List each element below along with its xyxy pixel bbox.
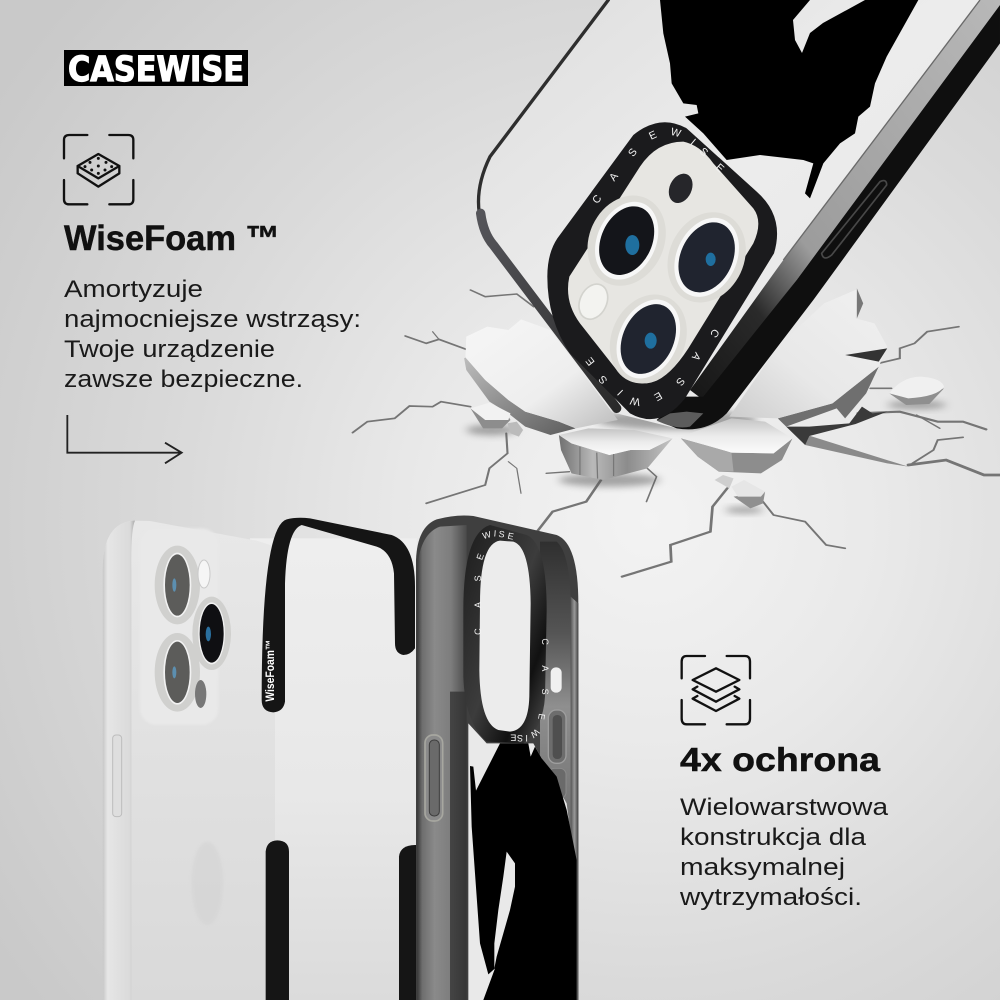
left band shade [450, 692, 467, 1000]
ring lettering: A [689, 350, 703, 363]
ring lettering: S [540, 689, 550, 695]
ring lettering: A [607, 170, 621, 184]
ring lettering: A [473, 602, 483, 608]
flash and sensor [574, 170, 697, 324]
right rim [571, 597, 578, 1000]
strip bottom left [266, 840, 289, 1000]
text block: 4x ochrona description: Wielowarstwowa [680, 794, 889, 821]
ring lettering: S [697, 145, 710, 159]
ring lettering: S [473, 575, 483, 581]
case right edge band with side button [657, 0, 1000, 429]
ring lettering: E [647, 129, 659, 143]
bottom dark case [416, 515, 578, 1000]
ring lettering: S [517, 733, 523, 743]
flake: right [729, 288, 887, 445]
ring lettering: C [707, 326, 722, 340]
ring lettering: I [493, 528, 497, 539]
ring lettering: W [628, 394, 641, 408]
flake: center left [559, 428, 673, 480]
camera plateau [568, 142, 758, 383]
cracked wall flakes behind phone [464, 288, 944, 508]
heading: WiseFoam: WiseFoam ™ [64, 219, 280, 258]
camera plateau [140, 528, 218, 725]
flash cutout [551, 667, 562, 693]
text block: WiseFoam description: Twoje urządzenie [64, 336, 275, 363]
ring lettering: E [584, 355, 597, 368]
WiseFoam strip top [262, 518, 415, 712]
ring lettering: C [590, 192, 605, 206]
logo: CASEWISE: CASEWISE [68, 50, 244, 90]
phone body [103, 521, 275, 1000]
text block: WiseFoam description: Amortyzuje [64, 276, 203, 303]
side button [425, 735, 443, 821]
top phone in clear case [476, 0, 1000, 429]
flake: center right [681, 418, 792, 473]
camera ring opening [479, 541, 531, 732]
ring lettering: A [540, 665, 550, 671]
left band metal [417, 525, 467, 1000]
text block: 4x ochrona description: wytrzymałości. [679, 884, 862, 911]
ring lettering: C [473, 628, 483, 635]
arrow [67, 415, 182, 463]
ring lettering: S [498, 529, 505, 540]
ring lettering: W [669, 126, 683, 140]
camera ring [547, 122, 777, 419]
phone side frame [103, 521, 135, 1000]
ring lettering: E [652, 389, 664, 403]
lenses [573, 183, 760, 396]
text block: 4x ochrona description [679, 794, 889, 911]
ring lettering [473, 528, 550, 743]
ring lettering: C [540, 638, 550, 645]
strip bottom right [399, 845, 420, 1000]
clear case area [250, 538, 417, 1000]
horse silhouette [660, 0, 918, 198]
ring lettering: I [615, 387, 626, 397]
ring lettering: I [525, 733, 528, 743]
logo ghost [191, 842, 223, 925]
ring lettering: I [688, 137, 698, 148]
ring lettering: S [596, 373, 610, 386]
ring lettering: E [536, 713, 547, 720]
soft shadows under rubble [466, 401, 946, 513]
text block: WiseFoam description [64, 276, 361, 393]
horse silhouette continuation [470, 743, 577, 1000]
ring lettering: W [528, 727, 541, 740]
WiseFoam strip label: WiseFoam™ [263, 640, 277, 702]
right buttons [548, 710, 566, 798]
lens cluster [155, 546, 231, 712]
text block: WiseFoam description: najmocniejsze wstrząsy: [64, 306, 361, 333]
wall cracks [353, 290, 1000, 577]
ring lettering: E [713, 161, 726, 175]
text block: 4x ochrona description: maksymalnej [680, 854, 845, 881]
heading: 4x ochrona: 4x ochrona [680, 741, 881, 778]
side button [113, 735, 122, 817]
text block: WiseFoam description: zawsze bezpieczne. [64, 366, 303, 393]
ring lettering: W [481, 529, 493, 541]
ring lettering: E [507, 531, 515, 542]
ring lettering: S [673, 375, 687, 388]
case interior opening [468, 723, 572, 1000]
bottom white phone with clear case [103, 518, 420, 1000]
rubble: small rocks [470, 377, 944, 508]
center cracked flakes in front of phone [559, 418, 792, 480]
right inner metal [540, 542, 572, 1000]
flake: left [464, 319, 618, 435]
text block: 4x ochrona description: konstrukcja dla [680, 824, 867, 851]
icon: layers in scan brackets [682, 656, 750, 724]
ring lettering [584, 126, 726, 408]
case shell [416, 515, 578, 1000]
ring lettering: S [626, 146, 640, 159]
case frame left [478, 0, 617, 408]
camera ring [463, 525, 547, 743]
ring lettering: E [510, 733, 516, 743]
icon: foam pad in scan brackets [64, 135, 133, 204]
ring lettering: E [474, 552, 486, 561]
case interior with horse silhouette [476, 0, 1000, 428]
